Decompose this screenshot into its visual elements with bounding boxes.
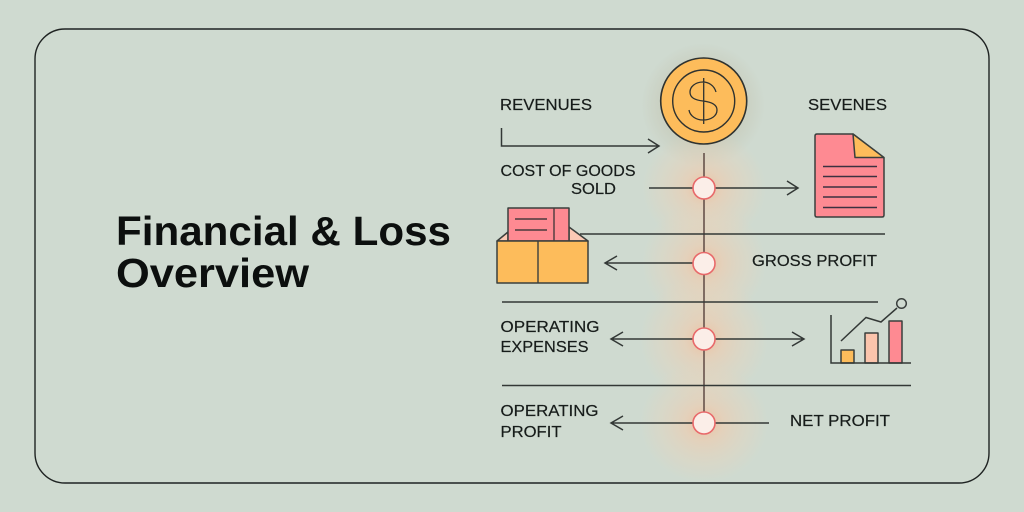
title: Overview <box>116 250 309 296</box>
label: operating profit: OPERATING <box>500 403 598 420</box>
label: gross profit: GROSS PROFIT <box>752 253 877 270</box>
label: cost of goods sold: COST OF GOODS <box>500 163 636 180</box>
icon: open box <box>497 208 588 283</box>
node: operating expenses <box>693 328 715 350</box>
label: cost of goods sold: SOLD <box>571 181 616 198</box>
label: operating profit <box>500 403 598 441</box>
label: net profit: NET PROFIT <box>790 413 890 430</box>
label: operating expenses: OPERATING <box>500 319 600 336</box>
node: net profit <box>693 412 715 434</box>
title: Financial & Loss <box>116 208 451 254</box>
label: operating expenses <box>500 319 600 356</box>
label: revenues: REVENUES <box>500 97 592 114</box>
label: sevenes: SEVENES <box>808 97 887 114</box>
arrow: revenues to coin <box>502 128 659 153</box>
icon: document <box>815 134 884 217</box>
title <box>116 208 451 296</box>
node: gross profit <box>693 252 715 274</box>
label: operating expenses: EXPENSES <box>500 339 588 356</box>
icon: dollar coin <box>661 58 747 144</box>
label: cost of goods sold <box>500 163 636 198</box>
icon: bar chart <box>831 299 911 363</box>
node: cost of goods <box>693 177 715 199</box>
arrow: operating expenses double-headed <box>611 332 804 346</box>
arrow: net profit to operating profit <box>611 416 769 430</box>
arrow: cost of goods to document <box>649 181 798 195</box>
label: operating profit: PROFIT <box>500 424 562 441</box>
dividers and spine <box>502 153 911 412</box>
arrow: gross profit to box <box>605 256 693 270</box>
glow: spine highlights <box>640 43 768 483</box>
